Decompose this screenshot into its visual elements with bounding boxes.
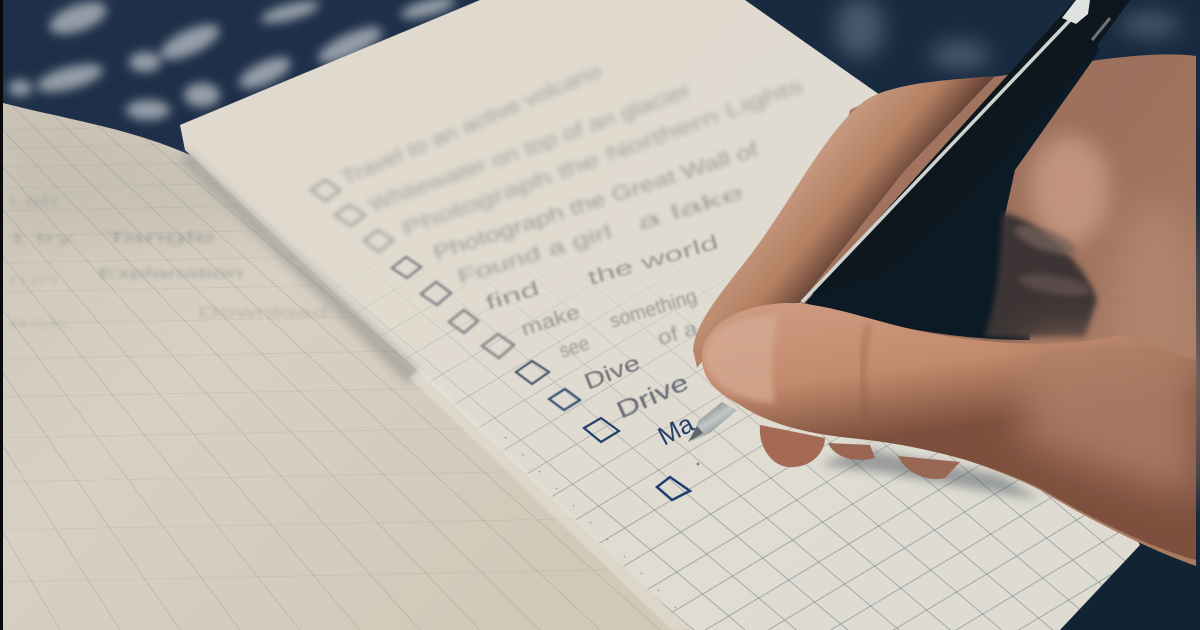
- pen clip ring: [1062, 0, 1090, 24]
- lower fingers: [760, 425, 825, 467]
- out of focus list text: [338, 60, 806, 241]
- out of focus list text: Whitewater on top of an glacier: [366, 80, 694, 217]
- table corner, bottom right: [1040, 540, 1200, 630]
- out of focus list text: Travel to an active volcano: [338, 60, 605, 190]
- checklist: blurred entries: something: [607, 285, 700, 333]
- dark shadow between pen and fingers: [805, 10, 1100, 340]
- out of focus list text: Photograph the Northern Lights: [399, 75, 806, 241]
- word: Drive: Drive: [612, 369, 693, 424]
- checkbox: [584, 418, 619, 442]
- spine shadow: [180, 150, 420, 384]
- blurred handwriting on left page: Tangle: [105, 229, 215, 246]
- checklist: blurred entries: [311, 60, 806, 363]
- blurred handwriting on left page: [8, 193, 328, 332]
- blurred handwriting on left page: Explanation: [98, 265, 243, 282]
- left black edge strip: [0, 0, 3, 630]
- blurred handwriting on left page: Download: [198, 304, 328, 321]
- checkbox row, out of focus: [311, 180, 393, 252]
- thumb: [702, 303, 1196, 560]
- checklist: blurred entries: find: [483, 278, 542, 315]
- blurred handwriting on left page: run: [8, 271, 58, 288]
- checklist: blurred entries: of a: [655, 317, 701, 350]
- pen highlight stripe: [802, 18, 1072, 302]
- left page shading: [18, 128, 221, 228]
- pen body: [810, 0, 1130, 295]
- checklist: blurred entries: Photograph the Great Wall of: [431, 139, 761, 265]
- blurred handwriting on left page: Lab: [8, 193, 58, 210]
- back of hand and wrist: [800, 54, 1196, 566]
- right hand highlight: [1110, 200, 1200, 460]
- fabric backdrop, top right: [740, 0, 1200, 130]
- pen dot: [697, 463, 699, 465]
- left page grid: [3, 105, 660, 630]
- pen: [688, 0, 1130, 442]
- word: Dive: Dive: [581, 350, 644, 395]
- checklist: blurred entries: see: [557, 333, 592, 363]
- checkbox: [549, 389, 580, 410]
- blurred handwriting on left page: 1 try: [8, 230, 74, 247]
- word: Make: Ma: [653, 408, 699, 451]
- checklist: blurred entries: make: [519, 301, 583, 341]
- page edge: [410, 368, 690, 630]
- checklist: blurred entries: the world: [585, 231, 721, 290]
- thumbnail: [704, 316, 778, 403]
- shadow cast by the hand on the page: [820, 448, 1040, 500]
- curled fingers in shadow: [985, 212, 1097, 337]
- checkbox: [516, 361, 549, 384]
- thumb crease: [862, 325, 872, 440]
- checklist: blurred entries: Found a girl: [455, 221, 614, 289]
- checklist: in-focus boxes and words: [516, 350, 699, 500]
- checkbox, empty last row: [657, 477, 690, 500]
- checklist: blurred entries: a lake: [635, 182, 747, 235]
- thumb blending into wrist: [1020, 340, 1196, 500]
- notebook left page: [3, 103, 690, 630]
- hand: [693, 10, 1200, 566]
- index finger: [693, 76, 995, 368]
- light palm patch: [1030, 135, 1110, 245]
- blurred handwriting on left page: ask: [8, 315, 69, 332]
- right page grid: [319, 267, 1125, 630]
- pen metal tip: [692, 402, 737, 441]
- blurred fabric backdrop, top left: [3, 0, 523, 170]
